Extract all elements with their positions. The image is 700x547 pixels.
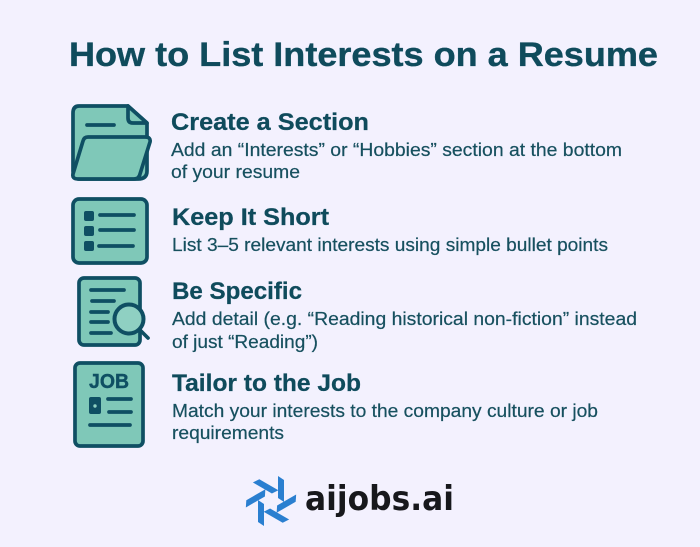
title: How to List Interests on a Resume: [69, 36, 658, 74]
icon: folder with document: [73, 106, 150, 179]
heading: keep it short: Keep It Short: [172, 204, 329, 231]
text: tailor to the job description: [172, 401, 598, 443]
text: tailor to the job description: requirements: [172, 423, 284, 443]
text: keep it short description: List 3–5 relevant interests using simple bullet points: [172, 235, 608, 255]
text: create a section description: of your resume: [171, 162, 300, 182]
text: create a section description: [171, 140, 622, 182]
wordmark: aijobs.ai: [305, 479, 454, 519]
text: create a section description: Add an “Interests” or “Hobbies” section at the bottom: [171, 140, 622, 160]
text: tailor to the job description: Match your interests to the company culture or job: [172, 401, 598, 421]
text: be specific description: of just “Reading”): [172, 332, 318, 352]
logo: aijobs.ai: [243, 476, 454, 526]
icon: job document: JOB: [89, 371, 129, 393]
heading: create a section: Create a Section: [171, 109, 369, 136]
icon: document with magnifier: [79, 278, 148, 345]
heading: tailor to the job: Tailor to the Job: [172, 370, 361, 397]
text: be specific description: Add detail (e.g. “Reading historical non-fiction” instead: [172, 309, 637, 329]
icon: blue pinwheel: [243, 476, 299, 526]
icon: bulleted list: [73, 199, 147, 263]
icon: job document: [75, 363, 143, 446]
heading: be specific: Be Specific: [172, 278, 302, 305]
text: be specific description: [172, 309, 637, 352]
